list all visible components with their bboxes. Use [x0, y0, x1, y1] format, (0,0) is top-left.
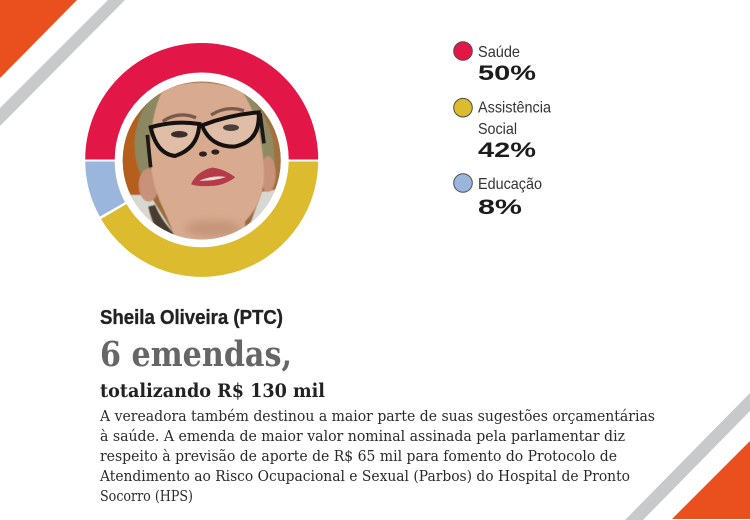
eyes	[171, 131, 188, 138]
donut chart	[85, 43, 318, 277]
decoration: top-left corner	[0, 0, 125, 126]
body text: respeito à previsão de aporte de R$ 65 mil para fomento do Protocolo de	[100, 447, 617, 465]
eyebrows	[163, 115, 196, 121]
legend item: Saúde	[454, 42, 536, 85]
body text: Atendimento ao Risco Ocupacional e Sexual (Parbos) do Hospital de Pronto	[99, 467, 630, 485]
legend item: Assistência Social: Assistência	[478, 100, 551, 116]
legend item: Assistência Social	[454, 98, 551, 162]
body text	[99, 407, 655, 505]
hair at neck	[148, 204, 176, 235]
body text: Socorro (HPS)	[100, 487, 193, 505]
slice: Educação 8%	[85, 162, 125, 217]
glasses	[151, 123, 199, 156]
legend item: Educação	[454, 174, 542, 219]
ears	[139, 168, 159, 202]
nose	[199, 151, 207, 157]
body text: A vereadora também destinou a maior parte de suas sugestões orçamentárias	[99, 407, 655, 425]
name heading: Sheila Oliveira (PTC)	[100, 307, 283, 329]
lips	[191, 168, 235, 186]
body text: à saúde. A emenda de maior valor nominal assinada pela parlamentar diz	[100, 427, 625, 445]
decoration: bottom-right corner	[625, 393, 750, 520]
legend item: Saúde: 50%	[478, 62, 536, 85]
headline: number of amendments: 6 emendas,	[100, 334, 292, 375]
legend item: Saúde: Saúde	[478, 44, 520, 61]
slice: Saúde 50%	[85, 43, 318, 160]
subheading: total value: totalizando R$ 130 mil	[100, 380, 325, 402]
legend item: Assistência Social: Social	[478, 121, 517, 138]
portrait photo	[120, 80, 288, 243]
legend item: Educação: Educação	[478, 176, 542, 193]
face	[150, 82, 264, 243]
legend item: Assistência Social: 42%	[478, 139, 536, 162]
legend	[454, 42, 551, 219]
legend item: Educação: 8%	[478, 196, 522, 219]
slice: Assistência Social 42%	[101, 162, 318, 277]
